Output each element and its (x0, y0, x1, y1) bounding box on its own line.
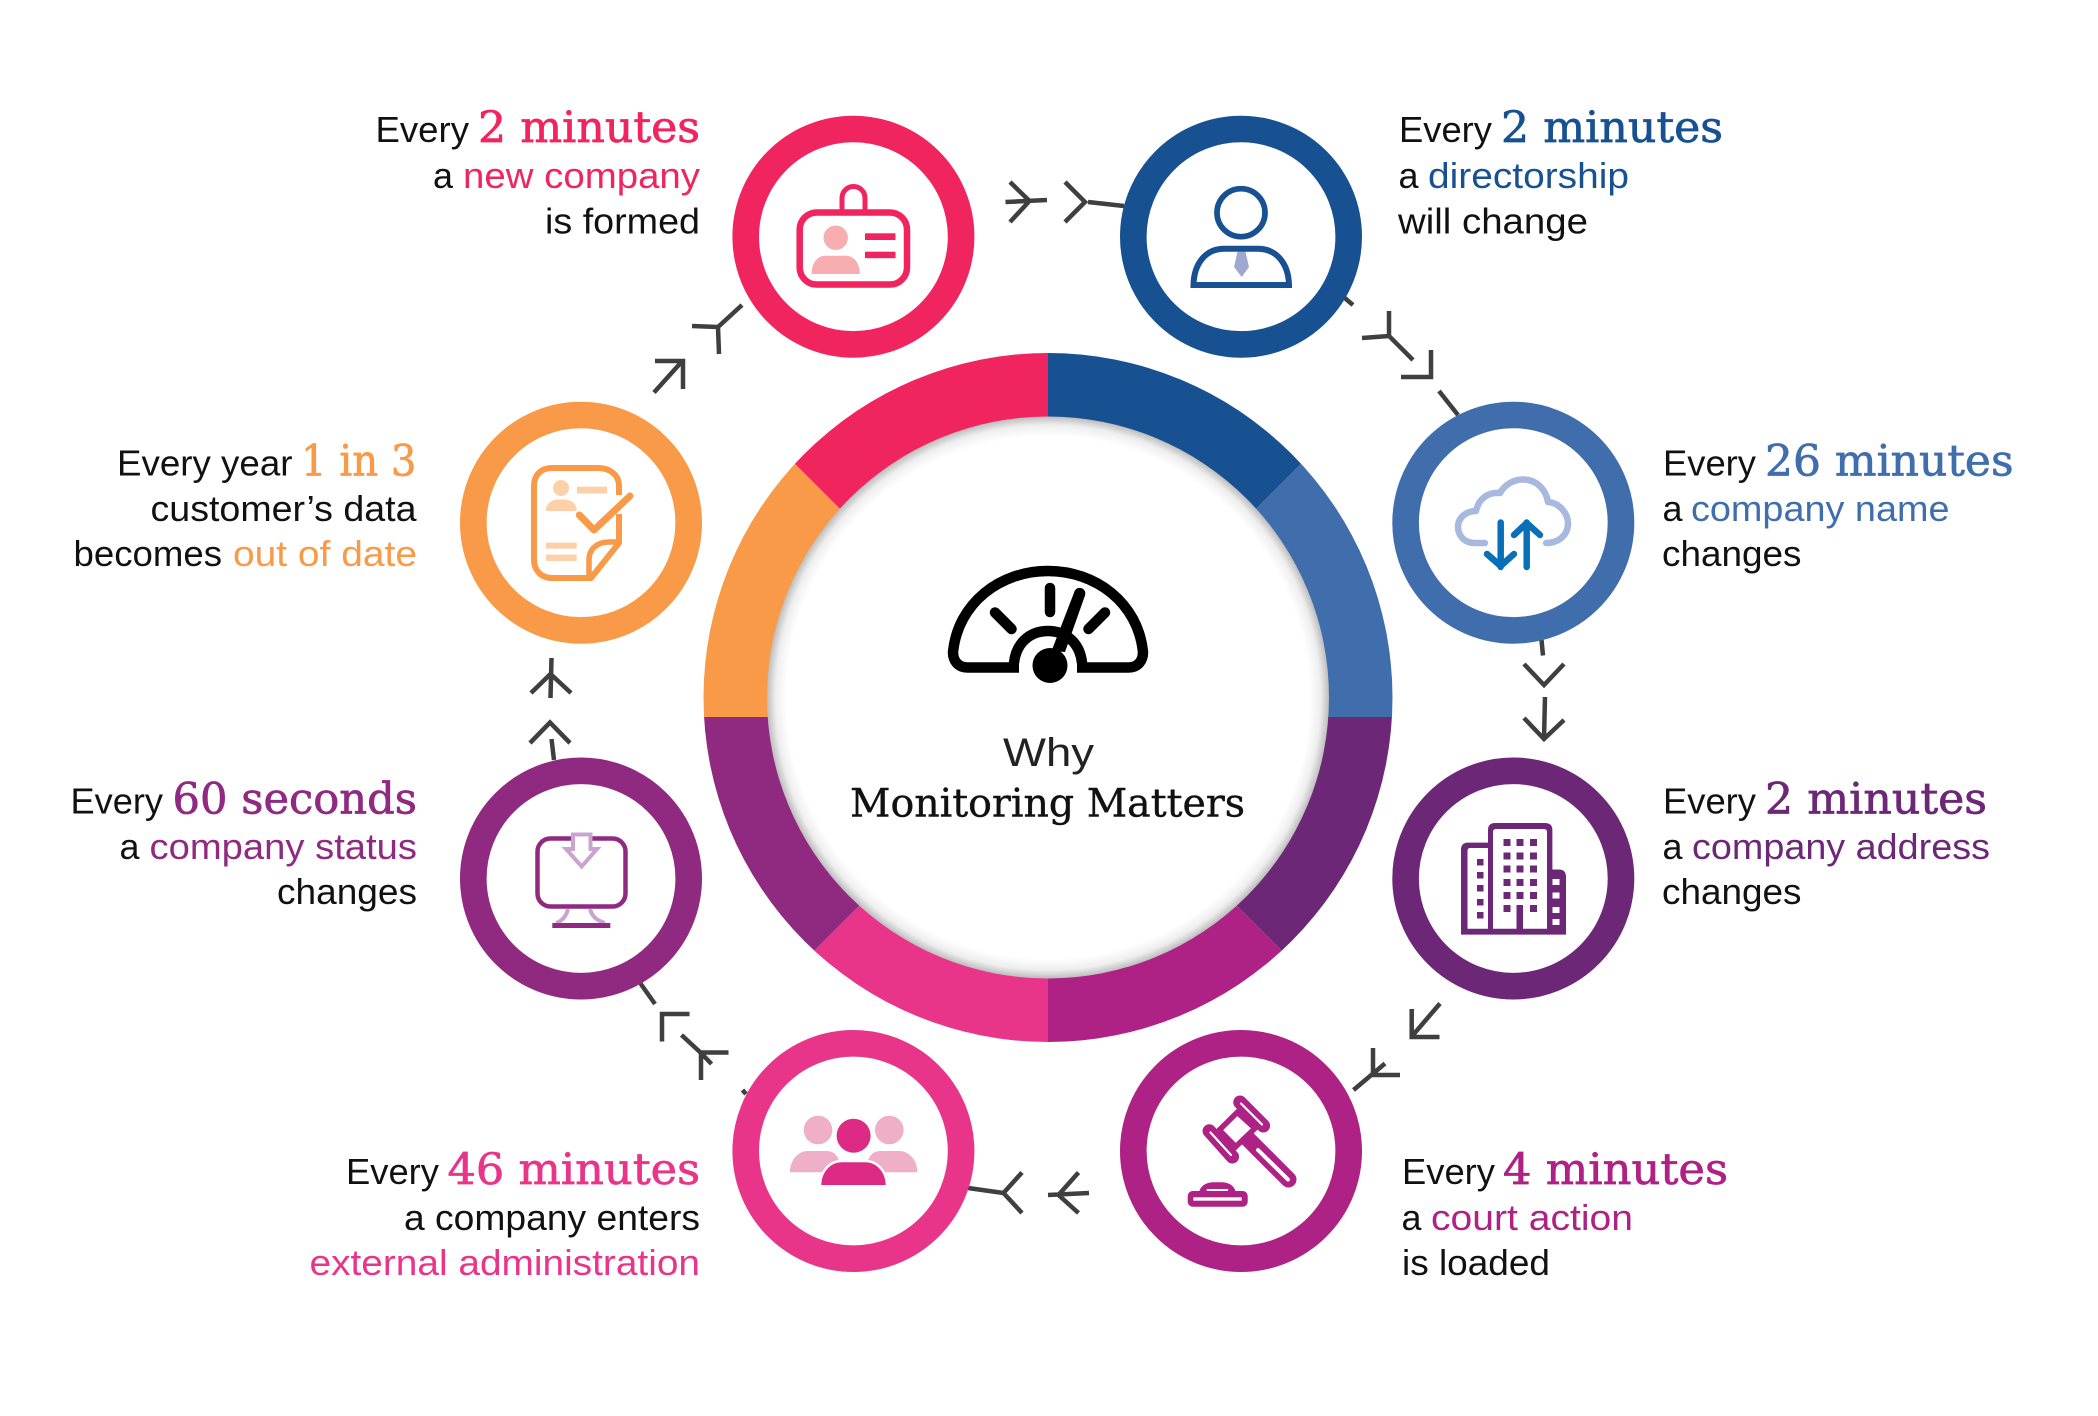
text: every 26 minutes a company name changes (1662, 436, 2014, 574)
text: every 60 seconds a company status changes: company status (150, 826, 417, 867)
text: every 26 minutes a company name changes: 26 minutes (1765, 436, 2014, 486)
panel: out of date data circle (473, 415, 689, 630)
text: every 46 minutes a company enters external administration: external administration (310, 1242, 700, 1283)
text: every year 1 in 3 customer's data becomes out of date (74, 436, 417, 574)
text: every 2 minutes a company address changes: changes (1662, 871, 1802, 912)
text: every 2 minutes a new company is formed (376, 103, 701, 242)
central white disc with soft inner shadow (767, 416, 1329, 978)
icon: person with tie (1194, 189, 1289, 285)
arrow: out of date data to new company (654, 305, 742, 392)
arrow: external administration to company status (640, 984, 746, 1094)
text: every 46 minutes a company enters external administration (310, 1145, 700, 1283)
text: every 4 minutes a court action is loaded: Every (1402, 1151, 1496, 1192)
text: every 46 minutes a company enters external administration: 46 minutes (448, 1145, 700, 1195)
text: every 2 minutes a directorship will change: Every (1399, 109, 1493, 150)
text: every 26 minutes a company name changes: changes (1662, 533, 1802, 574)
panel: directorship circle (1133, 129, 1349, 344)
text: every 2 minutes a new company is formed: Every (376, 109, 470, 150)
panel: company name circle (1406, 415, 1621, 630)
text: every 2 minutes a directorship will change: 2 minutes (1501, 103, 1723, 153)
text: every 4 minutes a court action is loaded: 4 minutes (1503, 1145, 1728, 1195)
text: every 2 minutes a new company is formed: new company (463, 155, 701, 196)
text: every 4 minutes a court action is loaded: a (1402, 1197, 1422, 1238)
text: every 2 minutes a directorship will change: a (1398, 155, 1419, 196)
arrow: new company to directorship (1006, 182, 1124, 222)
text: every 60 seconds a company status changes: a (120, 826, 140, 867)
text: every year 1 in 3 customer's data becomes out of date: Every year (117, 442, 292, 484)
text: every year 1 in 3 customer's data becomes out of date: out of date (233, 533, 417, 574)
title: Why (1003, 731, 1094, 775)
text: every 26 minutes a company name changes: Every (1663, 442, 1757, 484)
panel: company status circle (473, 771, 689, 986)
arrow: company name to company address (1524, 640, 1564, 739)
text: every 4 minutes a court action is loaded: court action (1431, 1197, 1633, 1238)
icon: ID badge (800, 186, 907, 284)
text: every 2 minutes a new company is formed: a (433, 155, 454, 196)
arrow: directorship to company name (1343, 296, 1458, 415)
text: every 2 minutes a new company is formed: 2 minutes (478, 103, 700, 153)
arrows between stat circles (530, 182, 1564, 1213)
panel: court action circle (1133, 1043, 1349, 1259)
text: every 2 minutes a company address changes: a (1662, 826, 1683, 867)
text: every 26 minutes a company name changes: a (1662, 488, 1683, 529)
text: every 2 minutes a company address changes: company address (1692, 826, 1990, 867)
text: every 2 minutes a directorship will change: directorship (1428, 155, 1629, 196)
panel: external administration circle (746, 1043, 961, 1259)
text: every 2 minutes a company address changes: Every (1663, 780, 1757, 822)
text: every 2 minutes a company address changes: 2 minutes (1765, 774, 1987, 824)
text: every 4 minutes a court action is loaded (1402, 1145, 1728, 1283)
text: every 26 minutes a company name changes: company name (1691, 488, 1950, 529)
text: every 60 seconds a company status changes: 60 seconds (172, 774, 417, 824)
text: every year 1 in 3 customer's data becomes out of date: becomes (74, 533, 222, 574)
title (850, 731, 1245, 826)
icon: speedometer gauge (953, 571, 1143, 683)
text: every 60 seconds a company status changes (70, 774, 417, 912)
icon: cloud with up and down arrows (1458, 479, 1568, 567)
arrow: company status to out of date data (530, 658, 571, 760)
arrow: company address to court action (1354, 1004, 1440, 1090)
icon: office buildings (1461, 823, 1566, 935)
text: every 2 minutes a company address changes (1662, 774, 1990, 912)
icon: gavel (1188, 1102, 1288, 1207)
panel: company address circle (1406, 771, 1621, 986)
text: every 46 minutes a company enters external administration: Every (346, 1151, 440, 1192)
text: every 4 minutes a court action is loaded: is loaded (1402, 1242, 1550, 1283)
icon: group of three people (790, 1116, 917, 1186)
icon: document with check mark (534, 468, 630, 578)
text: every year 1 in 3 customer's data becomes out of date: 1 in 3 (301, 436, 416, 486)
text: every 60 seconds a company status changes: changes (277, 871, 417, 912)
central segmented ring (704, 353, 1392, 1042)
title: Monitoring Matters (850, 782, 1245, 826)
text: every 2 minutes a new company is formed: is formed (545, 200, 700, 242)
text: every 46 minutes a company enters external administration: a company enters (404, 1197, 700, 1238)
arrow: court action to external administration (968, 1172, 1089, 1213)
text: every 2 minutes a directorship will change: will change (1397, 200, 1588, 242)
panel: new company circle (746, 129, 961, 344)
text: every 60 seconds a company status changes: Every (70, 780, 164, 822)
text: every year 1 in 3 customer's data becomes out of date: customer’s data (150, 488, 417, 529)
icon: monitor with download arrow (538, 834, 626, 928)
text: every 2 minutes a directorship will change (1397, 103, 1723, 242)
